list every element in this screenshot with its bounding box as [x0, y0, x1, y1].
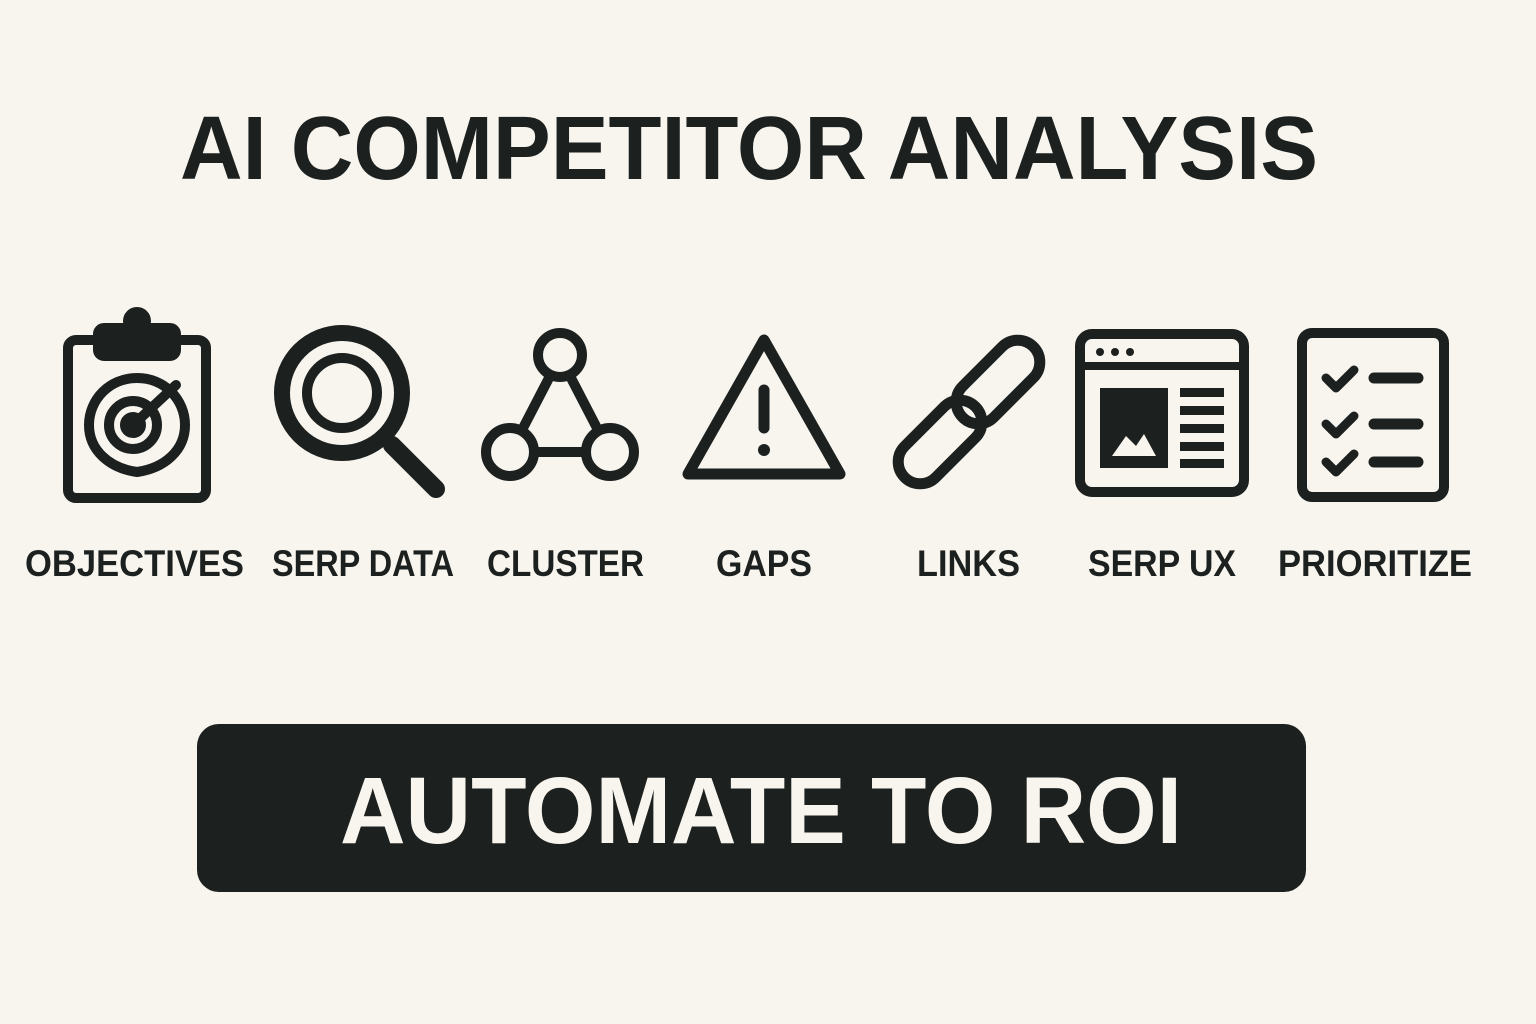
labels: GAPS	[716, 543, 812, 584]
button: automate to roi: AUTOMATE TO ROI	[340, 758, 1182, 864]
labels: SERP UX	[1088, 543, 1236, 584]
labels	[25, 543, 1472, 584]
icon: serp data magnifier	[282, 333, 436, 489]
labels: CLUSTER	[487, 543, 644, 584]
labels: PRIORITIZE	[1278, 543, 1472, 584]
labels: LINKS	[917, 543, 1020, 584]
title: AI COMPETITOR ANALYSIS	[180, 99, 1318, 199]
labels: SERP DATA	[272, 543, 454, 584]
icon: links chain	[889, 331, 1049, 493]
button: automate to roi	[197, 724, 1306, 892]
icon: objectives clipboard target	[68, 312, 206, 498]
icon: serp ux browser	[1080, 334, 1244, 492]
icon: cluster	[486, 333, 634, 476]
labels: OBJECTIVES	[25, 543, 244, 584]
icon: gaps warning	[688, 340, 840, 474]
icon: prioritize checklist	[1302, 333, 1444, 497]
